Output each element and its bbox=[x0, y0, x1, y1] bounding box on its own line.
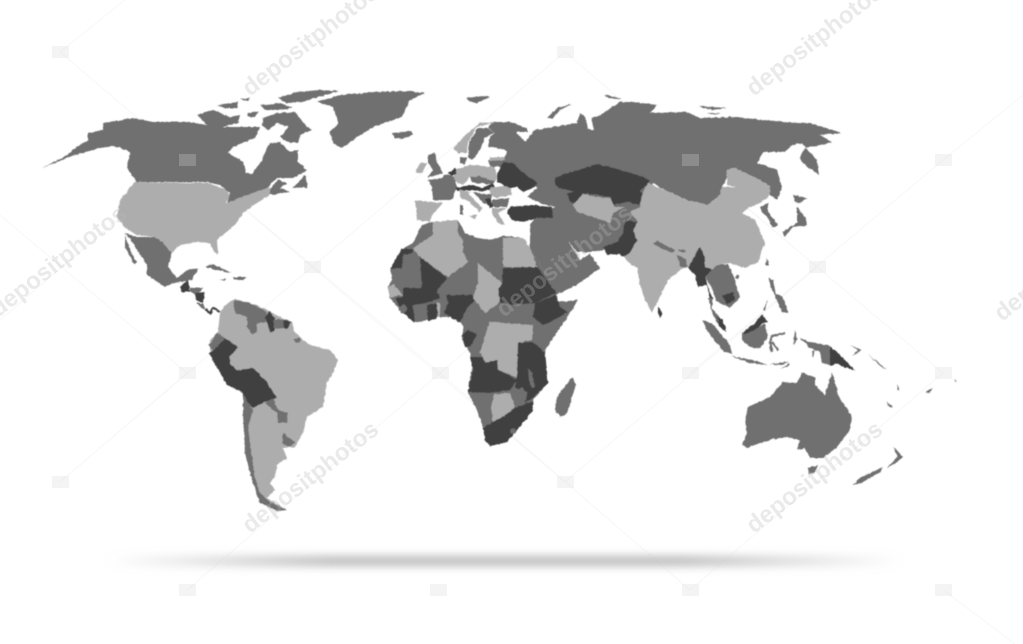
australia bbox=[742, 372, 852, 458]
south africa bbox=[483, 402, 533, 446]
gabon bbox=[462, 330, 477, 347]
dark alpine strip bbox=[455, 183, 495, 192]
uk bbox=[427, 153, 443, 178]
eurasia bbox=[415, 95, 842, 332]
west african band bbox=[395, 288, 440, 323]
central america bbox=[180, 280, 220, 313]
bulgaria bbox=[492, 198, 510, 207]
bangladesh bbox=[677, 255, 688, 267]
pacific islands bbox=[793, 330, 957, 408]
sulawesi bbox=[770, 333, 785, 352]
borneo bbox=[742, 323, 768, 348]
ireland bbox=[415, 163, 427, 173]
uzbekistan bbox=[573, 194, 625, 223]
caribbean islands bbox=[205, 264, 247, 281]
nepal bbox=[653, 241, 675, 253]
guinea dot bbox=[399, 305, 407, 313]
china and india bbox=[622, 168, 770, 312]
philippines bbox=[763, 278, 788, 313]
malaysia bbox=[717, 317, 727, 332]
brazil argentina colombia base bbox=[210, 299, 338, 511]
chad bbox=[473, 263, 502, 313]
victoria and banks islands bbox=[197, 110, 240, 128]
ghana bbox=[427, 303, 438, 321]
watermarks: depositphotos bbox=[237, 416, 384, 539]
romania bbox=[490, 185, 512, 198]
venezuela bbox=[233, 300, 267, 334]
ukraine and belarus bbox=[497, 162, 538, 192]
watermark camera icons bbox=[52, 46, 952, 596]
botswana bbox=[491, 393, 515, 422]
latvia and lithuania bbox=[488, 160, 505, 167]
algeria bbox=[413, 220, 468, 277]
russia and middle east base bbox=[488, 102, 842, 295]
western sahara bbox=[390, 249, 413, 269]
kamchatka bbox=[800, 147, 819, 175]
italy bbox=[460, 190, 482, 219]
zimbabwe bbox=[510, 387, 527, 407]
tasmania bbox=[808, 465, 818, 474]
netherlands bbox=[448, 168, 457, 176]
africa bbox=[388, 220, 578, 446]
angola and zambia bbox=[468, 357, 517, 393]
iceland bbox=[392, 131, 413, 139]
madagascar bbox=[555, 377, 576, 417]
greece bbox=[492, 208, 507, 225]
tanzania and mozambique bbox=[515, 342, 548, 403]
watermarks: depositphotos bbox=[491, 200, 638, 323]
egypt bbox=[503, 238, 537, 267]
southeast asia and oceania bbox=[702, 278, 957, 485]
estonia bbox=[490, 157, 505, 161]
japan bbox=[782, 195, 807, 237]
amazon island bbox=[294, 338, 300, 343]
watermarks: depositphotos bbox=[741, 416, 888, 539]
mali bbox=[420, 257, 447, 290]
senegal bbox=[388, 284, 403, 297]
turkey bbox=[507, 205, 553, 222]
namibia bbox=[468, 392, 494, 428]
arctic russian islands bbox=[466, 95, 727, 118]
balkans bbox=[473, 192, 492, 205]
korea bbox=[760, 203, 778, 228]
sweden bbox=[468, 128, 495, 160]
lesotho bbox=[510, 428, 516, 434]
bhutan bbox=[678, 249, 685, 252]
indochina bbox=[705, 264, 740, 308]
baffin island bbox=[262, 112, 312, 143]
shadow under map bbox=[110, 555, 900, 567]
kazakhstan bbox=[555, 164, 650, 205]
newfoundland and maritimes bbox=[265, 175, 308, 195]
france bbox=[428, 174, 457, 200]
poland and germany bbox=[453, 165, 497, 185]
cote d'ivoire bbox=[413, 304, 428, 322]
queen elizabeth islands bbox=[217, 90, 340, 117]
sudan bbox=[498, 267, 556, 305]
paraguay bbox=[265, 398, 288, 423]
sri lanka bbox=[658, 307, 663, 318]
continent base bbox=[388, 220, 578, 446]
papua new guinea bbox=[830, 346, 855, 370]
north america bbox=[42, 90, 425, 313]
new zealand bbox=[853, 447, 903, 485]
greenland bbox=[317, 91, 425, 148]
spain bbox=[415, 200, 443, 222]
denmark bbox=[460, 157, 467, 165]
suriname bbox=[273, 319, 285, 329]
pakistan bbox=[603, 220, 638, 257]
drc bbox=[480, 322, 533, 378]
malay peninsula bbox=[708, 298, 727, 332]
south america bbox=[209, 299, 338, 511]
new guinea west bbox=[800, 338, 830, 365]
peru and bolivia bbox=[209, 338, 277, 408]
togo benin bbox=[437, 303, 440, 317]
czechia slovakia hungary bbox=[470, 176, 495, 184]
malawi bbox=[528, 368, 535, 388]
cambodia bbox=[722, 292, 735, 304]
guyana bbox=[265, 311, 275, 333]
taiwan and hainan bbox=[735, 258, 769, 279]
ethiopia bbox=[533, 295, 568, 325]
chile bbox=[243, 393, 287, 511]
french guiana bbox=[283, 319, 291, 329]
niger bbox=[437, 263, 478, 295]
sumatra bbox=[702, 320, 732, 354]
arctic islands bbox=[197, 90, 340, 143]
usa bbox=[117, 182, 270, 255]
ecuador bbox=[209, 333, 225, 352]
norway bbox=[453, 122, 497, 153]
canada and alaska bbox=[42, 118, 307, 204]
world map bbox=[42, 90, 957, 511]
myanmar bbox=[688, 247, 713, 300]
java and lesser sunda bbox=[731, 356, 790, 369]
sardinia bbox=[460, 205, 463, 215]
montenegro bbox=[485, 198, 493, 208]
mexico bbox=[125, 233, 198, 287]
east malaysia bbox=[742, 315, 768, 334]
uruguay bbox=[282, 433, 295, 447]
nigeria bbox=[444, 295, 476, 322]
